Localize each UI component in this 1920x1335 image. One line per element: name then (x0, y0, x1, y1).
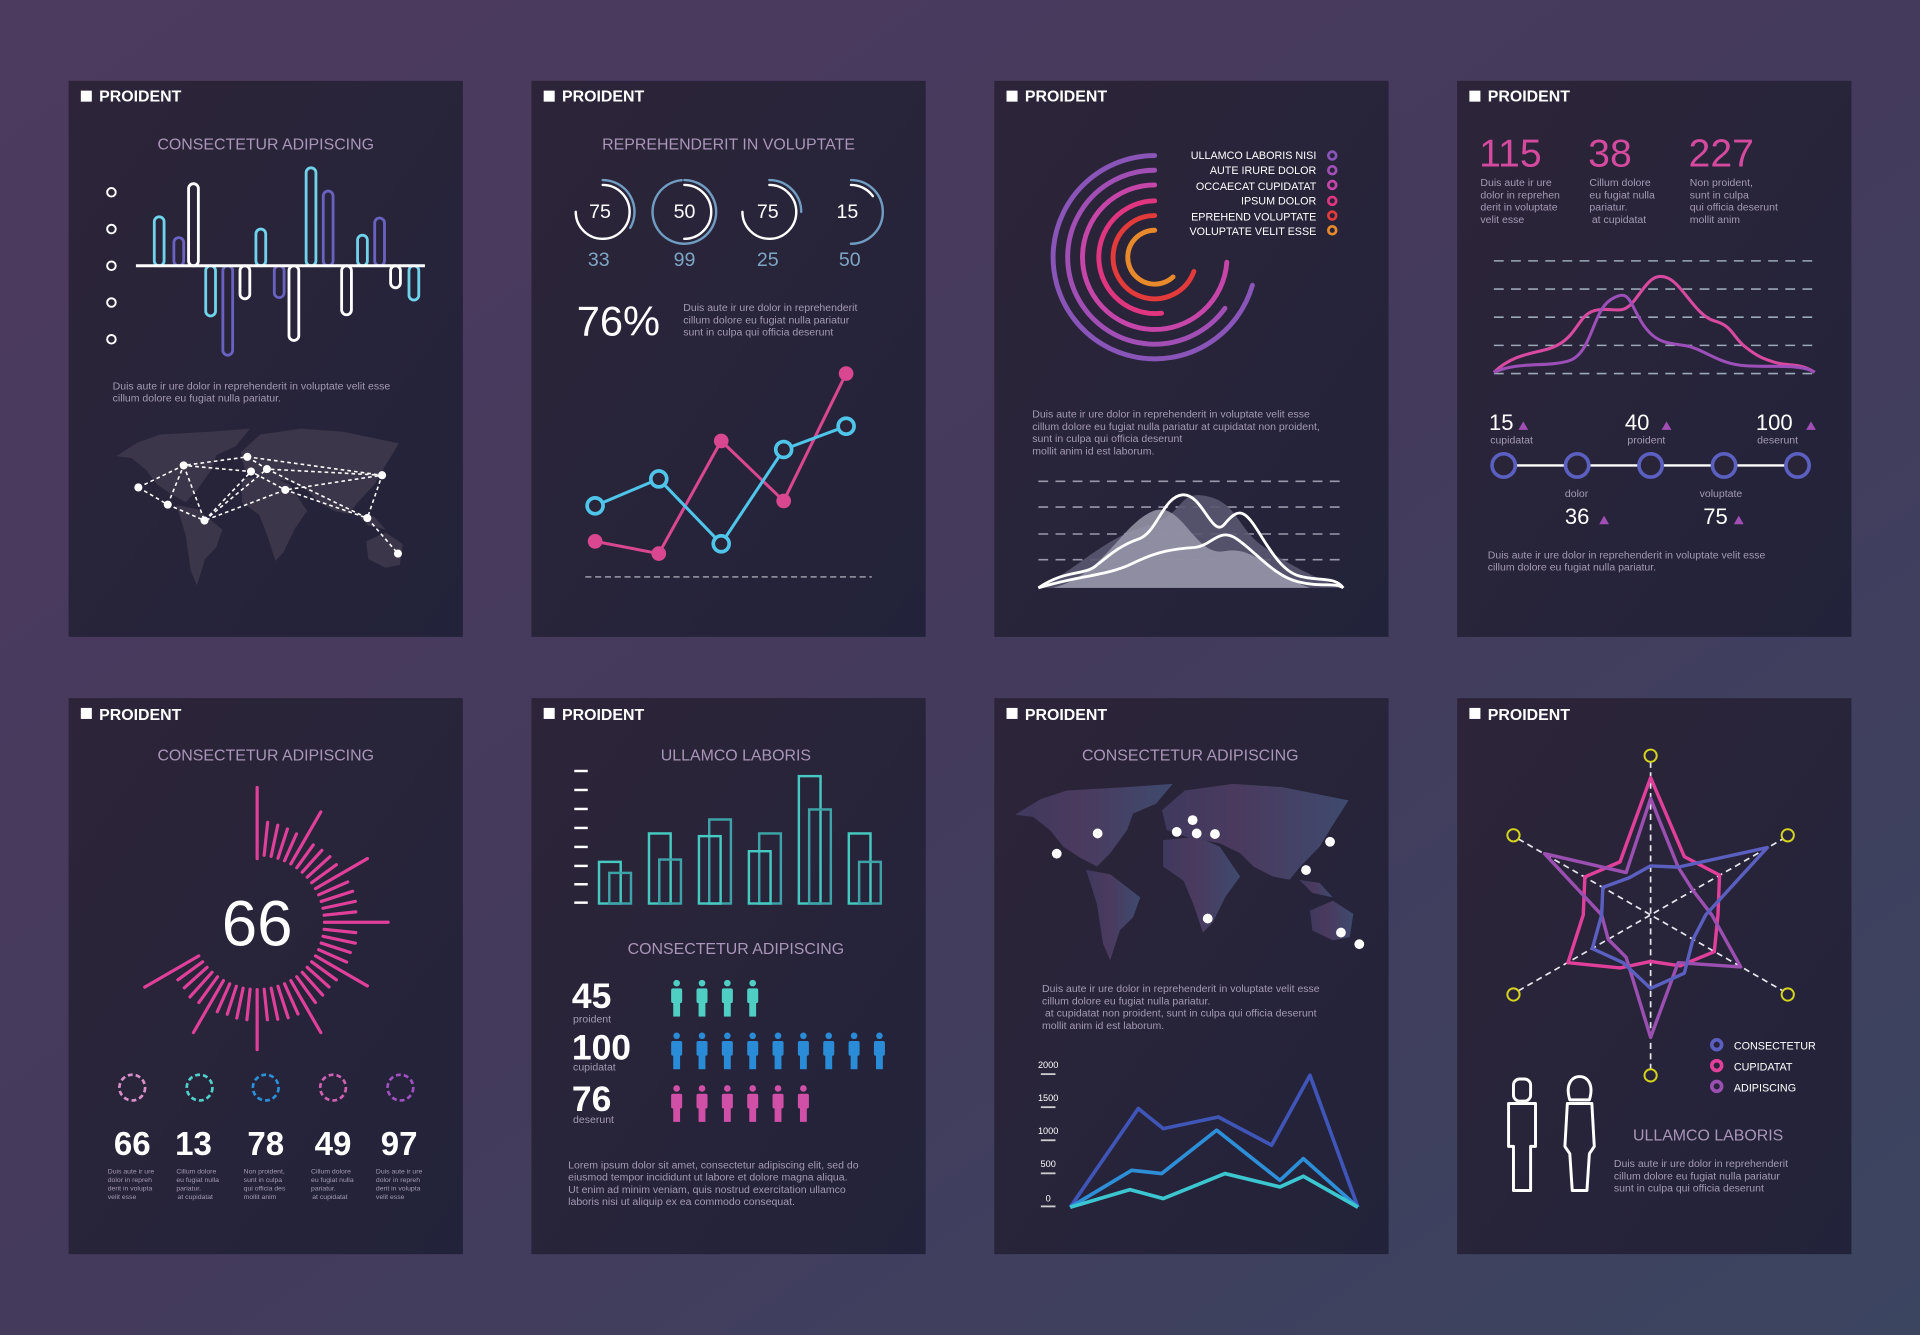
timeline: deserunt (1757, 434, 1798, 446)
line chart: 0 (1046, 1193, 1051, 1204)
timeline: 100 (1756, 410, 1793, 435)
panel: bars and people: cupidatat (573, 1061, 616, 1073)
number captions: at cupidatat (1592, 214, 1646, 226)
heading 2: CONSECTETUR ADIPISCING (628, 941, 844, 958)
timeline: proident (1627, 434, 1665, 446)
header: proident: PROIDENT (1488, 89, 1570, 106)
big stat 76%: 76% (577, 298, 660, 345)
people stats labels (572, 976, 631, 1119)
radar (1507, 750, 1794, 1081)
stat captions: Duis aute ir ure (108, 1168, 154, 1175)
legend: VOLUPTATE VELIT ESSE (1189, 226, 1316, 238)
panel: gauges and line chart: 99 (674, 249, 695, 271)
text block: sunt in culpa qui officia deserunt (1032, 433, 1182, 445)
text block: cillum dolore eu fugiat nulla pariatur. (1042, 995, 1210, 1007)
panel: gauges and line chart (531, 81, 926, 637)
stat captions: eu fugiat nulla (311, 1177, 354, 1184)
timeline: 36 (1565, 504, 1589, 529)
gauge numbers: 15 (836, 201, 858, 223)
big number 66: 66 (222, 889, 293, 960)
people stats labels: 45 (572, 976, 611, 1016)
line chart: 2000 (1038, 1060, 1058, 1070)
stat captions: dolor in repreh (376, 1177, 420, 1184)
heading: REPREHENDERIT IN VOLUPTATE (602, 136, 855, 153)
text block: sunt in culpa qui officia deserunt (1614, 1183, 1764, 1195)
timeline (1489, 410, 1816, 529)
legend: CUPIDATAT (1734, 1061, 1793, 1073)
panel: gauges and line chart: 50 (839, 249, 861, 271)
outlined bar chart (574, 771, 881, 904)
legend: IPSUM DOLOR (1241, 196, 1317, 208)
panel: bars and people (531, 698, 926, 1254)
text block: Duis aute ir ure dolor in reprehenderit in voluptate velit esse (1032, 409, 1310, 421)
header: proident: PROIDENT (562, 89, 645, 106)
panel: bars and people: proident (573, 1014, 611, 1026)
stat captions: Cillum dolore (176, 1168, 216, 1175)
stat captions: Duis aute ir ure (376, 1168, 423, 1175)
text block: eiusmod tempor incididunt ut labore et dolore magna aliqua. (568, 1172, 848, 1184)
stat captions: at cupidatat (178, 1194, 213, 1201)
stat captions: qui officia des (244, 1185, 286, 1192)
text block: mollit anim id est laborum. (1032, 445, 1154, 457)
text block: Duis aute ir ure dolor in reprehenderit (1614, 1158, 1788, 1170)
header: proident: PROIDENT (1025, 89, 1107, 106)
heading: CONSECTETUR ADIPISCING (157, 136, 374, 153)
axis circles (107, 188, 116, 344)
stat captions: derit in volupta (108, 1185, 152, 1192)
timeline: 75 (1703, 504, 1728, 529)
number captions: derit in voluptate (1480, 202, 1558, 214)
stat numbers: 49 (315, 1126, 351, 1163)
stat captions: Non proident, (244, 1168, 285, 1175)
timeline: dolor (1565, 488, 1589, 500)
line chart: 1000 (1038, 1126, 1058, 1136)
heading: CONSECTETUR ADIPISCING (157, 748, 374, 765)
number captions: Duis aute ir ure (1480, 177, 1552, 189)
timeline: voluptate (1700, 488, 1742, 500)
header: proident: PROIDENT (562, 707, 645, 724)
panel: concentric arcs (994, 81, 1389, 637)
text block: mollit anim id est laborum. (1042, 1020, 1164, 1032)
legend: OCCAECAT CUPIDATAT (1196, 181, 1317, 193)
legend (1189, 150, 1317, 238)
text block: cillum dolore eu fugiat nulla pariatur (1614, 1170, 1780, 1182)
legend: AUTE IRURE DOLOR (1210, 165, 1317, 177)
gauge numbers: 50 (674, 201, 695, 223)
text block: cillum dolore eu fugiat nulla pariatur. (1488, 562, 1656, 574)
panel: radar chart (1457, 698, 1851, 1254)
gauge numbers: 75 (589, 201, 611, 223)
line chart: 1500 (1038, 1093, 1058, 1103)
stat text: sunt in culpa qui officia deserunt (683, 327, 833, 339)
gauges (576, 180, 883, 244)
timeline: 40 (1625, 410, 1649, 435)
stat numbers: 13 (175, 1126, 212, 1163)
arc chart (1053, 156, 1252, 359)
header: proident: PROIDENT (99, 89, 182, 106)
text block: laboris nisi ut aliquip ex ea commodo consequat. (568, 1196, 795, 1208)
text block: Ut enim ad minim veniam, quis nostrud exercitation ullamco (568, 1184, 846, 1196)
big numbers: 227 (1689, 133, 1754, 176)
number captions: eu fugiat nulla (1589, 189, 1655, 201)
line chart (1038, 1060, 1358, 1207)
stat text: Duis aute ir ure dolor in reprehenderit (683, 302, 858, 314)
number captions: pariatur. (1589, 202, 1627, 214)
bar chart (136, 168, 425, 355)
stat captions: eu fugiat nulla (176, 1177, 219, 1184)
stat captions: sunt in culpa (244, 1177, 282, 1184)
stat numbers: 97 (381, 1126, 418, 1163)
header: proident: PROIDENT (99, 707, 182, 724)
text block: at cupidatat non proident, sunt in culpa qui officia deserunt (1042, 1008, 1317, 1020)
big numbers: 115 (1479, 133, 1542, 176)
stat captions: at cupidatat (312, 1194, 348, 1201)
stat captions: velit esse (376, 1194, 405, 1201)
stat captions: pariatur. (176, 1185, 201, 1192)
text block: Duis aute ir ure dolor in reprehenderit in voluptate velit esse (1488, 549, 1766, 561)
text block: Duis aute ir ure dolor in reprehenderit in voluptate velit esse (1042, 983, 1320, 995)
stat captions: derit in volupta (376, 1185, 421, 1192)
panel: gauges and line chart: 25 (757, 249, 779, 271)
header: proident: PROIDENT (1488, 707, 1570, 724)
legend: ADIPISCING (1734, 1082, 1796, 1094)
people stats labels: 76 (572, 1079, 611, 1119)
panel: stats waves timeline (1457, 81, 1851, 637)
stat captions: pariatur. (311, 1185, 336, 1192)
legend: CONSECTETUR (1734, 1041, 1816, 1053)
number captions: qui officia deserunt (1690, 202, 1778, 214)
number captions: dolor in reprehen (1480, 189, 1560, 201)
panel: radial 66 (69, 698, 463, 1254)
panel: bars and people: deserunt (573, 1114, 614, 1126)
number captions (1480, 177, 1778, 226)
text block: Duis aute ir ure dolor in reprehenderit in voluptate velit esse (113, 380, 390, 392)
heading: CONSECTETUR ADIPISCING (1082, 748, 1298, 765)
people stats labels: 100 (572, 1027, 631, 1067)
number captions: mollit anim (1690, 214, 1740, 226)
stat numbers: 66 (114, 1126, 151, 1163)
stat numbers (114, 1126, 418, 1163)
number captions: Non proident, (1690, 177, 1753, 189)
stat captions: mollit anim (244, 1194, 277, 1201)
big numbers (1479, 133, 1754, 176)
icon: man and woman (1509, 1077, 1594, 1190)
number captions: Cillum dolore (1589, 177, 1651, 189)
big numbers: 38 (1588, 133, 1632, 176)
timeline: 15 (1489, 410, 1513, 435)
heading: ullamco laboris: ULLAMCO LABORIS (1633, 1127, 1783, 1144)
world map with dots (1015, 784, 1364, 960)
line chart (585, 366, 872, 577)
legend: ULLAMCO LABORIS NISI (1191, 150, 1316, 162)
people icons (671, 980, 885, 1122)
header: proident: PROIDENT (1025, 707, 1107, 724)
number captions: velit esse (1480, 214, 1524, 226)
timeline: cupidatat (1490, 434, 1533, 446)
legend: EPREHEND VOLUPTATE (1191, 211, 1316, 223)
stat captions: velit esse (108, 1194, 136, 1201)
number captions: sunt in culpa (1690, 189, 1749, 201)
text block: cillum dolore eu fugiat nulla pariatur at cupidatat non proident, (1032, 421, 1320, 433)
radial chart (145, 788, 388, 1050)
stat captions: dolor in repreh (108, 1177, 152, 1184)
gauge numbers: 75 (757, 201, 779, 223)
world map with network (116, 429, 403, 585)
stat numbers: 78 (247, 1126, 284, 1163)
stat text: cillum dolore eu fugiat nulla pariatur (683, 314, 850, 326)
dashed ring icons (119, 1075, 413, 1100)
text block: cillum dolore eu fugiat nulla pariatur. (113, 393, 281, 405)
panel: bar chart and network map (69, 81, 463, 637)
gauge numbers (589, 201, 858, 223)
panel: world map and line chart (994, 698, 1389, 1254)
stat captions: Cillum dolore (311, 1168, 351, 1175)
line chart: 500 (1041, 1159, 1056, 1169)
area chart (1038, 481, 1343, 588)
panel: gauges and line chart: 33 (588, 249, 610, 271)
heading: ULLAMCO LABORIS (661, 748, 811, 765)
stat captions (108, 1168, 423, 1201)
wave chart (1494, 261, 1815, 374)
text block: Lorem ipsum dolor sit amet, consectetur adipiscing elit, sed do (568, 1159, 859, 1171)
legend (1712, 1040, 1816, 1094)
